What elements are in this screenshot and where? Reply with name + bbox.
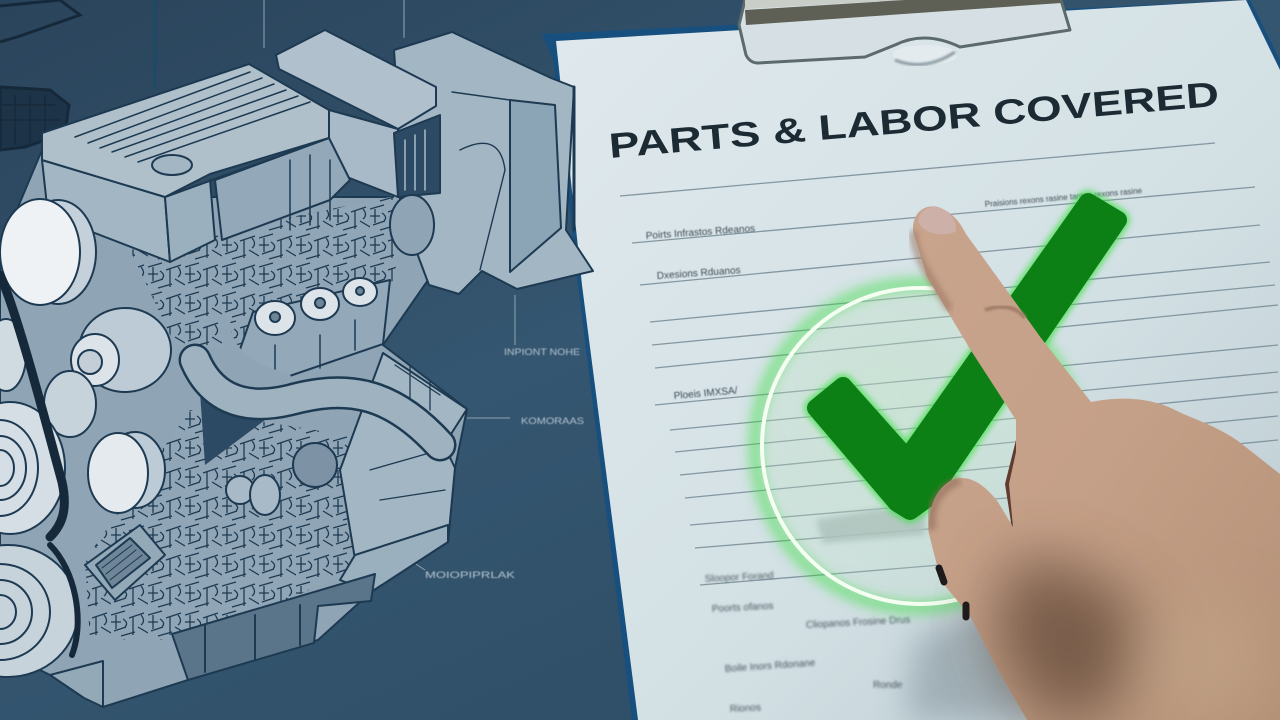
knuckle crease <box>985 307 1025 318</box>
intake ports <box>237 278 390 381</box>
green circle <box>755 284 1079 608</box>
second pipe <box>225 325 285 378</box>
lower form labels: Sloopor Forand <box>705 570 774 585</box>
idler pulley <box>71 308 171 392</box>
upper form labels: Praisions rexons rasine tanton rexons rasine <box>984 186 1143 209</box>
valve cover <box>42 64 350 262</box>
cylinder idler <box>88 432 165 513</box>
hand and pointing finger <box>913 206 1280 720</box>
clipboard <box>542 0 1280 720</box>
hand <box>905 206 1280 720</box>
upper form labels: Poirts Infrastos Rdeanos <box>645 223 755 242</box>
alternator end <box>390 195 434 255</box>
form rules <box>620 143 1278 585</box>
upper cylinder pulley <box>0 199 96 305</box>
engine <box>0 30 593 707</box>
dark nail tips <box>939 568 966 617</box>
lower right block <box>340 353 467 592</box>
pulleys <box>0 199 171 677</box>
dense detail areas <box>85 195 440 640</box>
lower form labels <box>705 570 911 715</box>
palm shadow <box>990 558 1150 720</box>
middle finger shadow <box>1005 440 1060 575</box>
upper form labels: Ploeis IMXSA/ <box>673 385 738 402</box>
upper form labels: Dxesions Rduanos <box>656 265 741 282</box>
sump and lower block <box>50 574 375 707</box>
background part silhouette <box>0 0 80 150</box>
engine block body <box>0 150 467 707</box>
engine callout labels: INPIONT NOHE <box>504 347 580 357</box>
cast shadow on paper <box>905 590 1040 720</box>
paper sheet <box>556 0 1280 720</box>
drive belt <box>0 275 64 537</box>
fingertip nail <box>918 207 956 234</box>
finger left tone <box>913 231 950 310</box>
engine callout labels: MOIOPIPRLAK <box>425 570 515 580</box>
engine callout labels <box>425 347 584 580</box>
back of hand highlight <box>1130 600 1270 720</box>
clipboard board <box>542 0 1280 720</box>
lower form labels: Rionos <box>730 702 761 715</box>
lower pulley <box>0 545 78 677</box>
right housing <box>394 32 593 294</box>
thumb tip tone <box>931 480 960 530</box>
large crank pulley <box>0 402 65 534</box>
lower form labels: Poorts ofanos <box>712 601 774 615</box>
engine callout labels: KOMORAAS <box>521 416 584 426</box>
intake pipe <box>195 360 440 445</box>
sensor box <box>85 525 165 600</box>
lower form labels: Cliopanos Frosine Drus <box>806 615 911 631</box>
green check mark <box>816 202 1118 511</box>
lower form labels: Boile Inors Rdonane <box>724 658 816 675</box>
small cylinders <box>226 443 337 515</box>
upper form labels <box>645 186 1143 402</box>
lower form labels: Ronde <box>873 680 903 691</box>
metal clip <box>739 0 1070 65</box>
air box <box>276 30 440 197</box>
smudged stamp box <box>816 509 925 543</box>
small pulley <box>44 371 96 437</box>
blueprint leader lines <box>155 0 515 570</box>
title: PARTS & LABOR COVERED <box>607 75 1220 166</box>
